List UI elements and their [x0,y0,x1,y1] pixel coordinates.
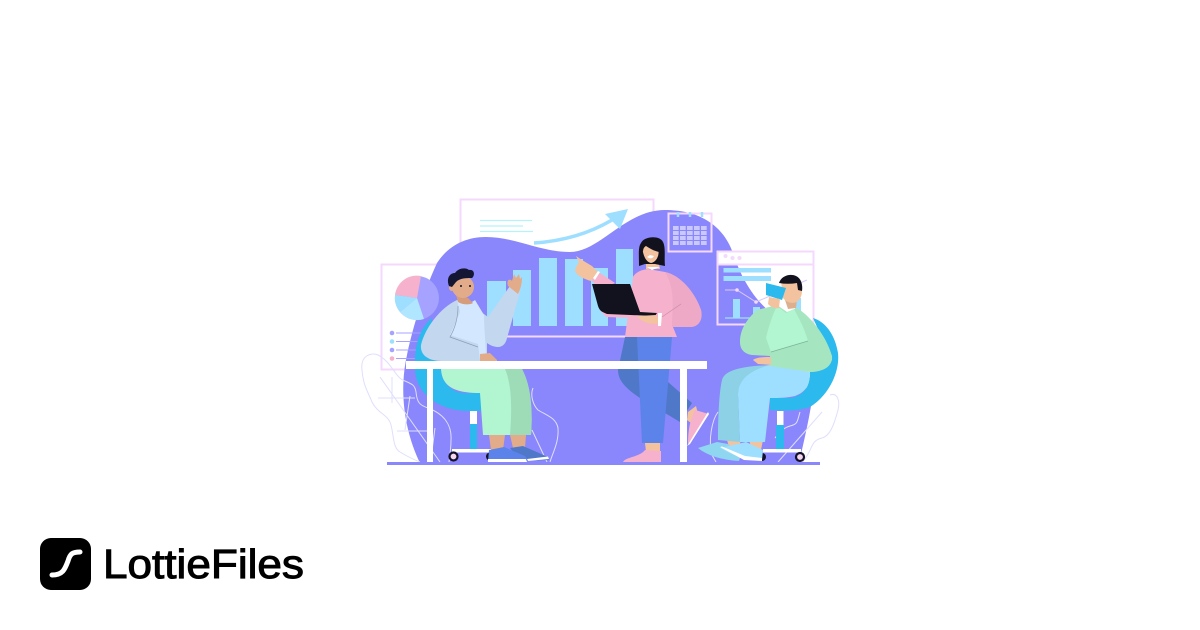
hair [448,268,474,287]
chair: left [415,318,494,460]
ankles [727,440,763,450]
front foot [645,443,660,452]
arrow: growth trend [534,209,628,243]
hand holding card [768,297,780,308]
ankles [489,435,526,450]
chair: right [758,318,838,461]
legs [441,369,532,435]
front leg [637,337,672,443]
sweater [625,269,702,337]
floor line [387,462,820,465]
neck and head [456,295,473,304]
purple background blob [403,210,812,463]
bar chart [487,249,633,336]
fringe [641,240,661,252]
hand on lap [480,353,497,361]
pants [738,365,810,442]
text lines placeholder in top chart [480,220,533,232]
hair [779,275,802,291]
sweater [740,305,832,372]
back leg [618,337,692,422]
laptop [592,284,657,316]
neck and head [785,300,797,309]
hand on lap [753,357,771,365]
table [406,361,707,462]
panel: left chart frame [382,264,450,370]
sleeve towards pointing hand [590,273,615,290]
forearm under laptop [637,315,660,324]
raised hand [507,274,522,294]
person: standing woman [575,237,709,462]
panel: top chart frame [460,200,654,262]
logo: LottieFiles [40,538,304,590]
neck [646,260,660,269]
hair back [639,237,665,266]
pie chart [395,276,439,320]
torso and raised arm [421,286,520,361]
panel: right browser window [718,252,814,324]
plant outline left [362,354,451,462]
calendar icon [668,212,712,252]
icon: logo square [40,538,91,590]
back foot [687,406,698,423]
pointing hand [575,256,598,281]
wordmark: LottieFiles [103,541,304,587]
shoes [698,442,741,461]
shoes [510,446,549,461]
plant outline right [532,388,839,462]
person: seated man left [421,268,549,462]
face [642,245,659,263]
person: seated man right [698,275,832,461]
phone card [766,283,786,300]
legend dots [390,331,424,361]
